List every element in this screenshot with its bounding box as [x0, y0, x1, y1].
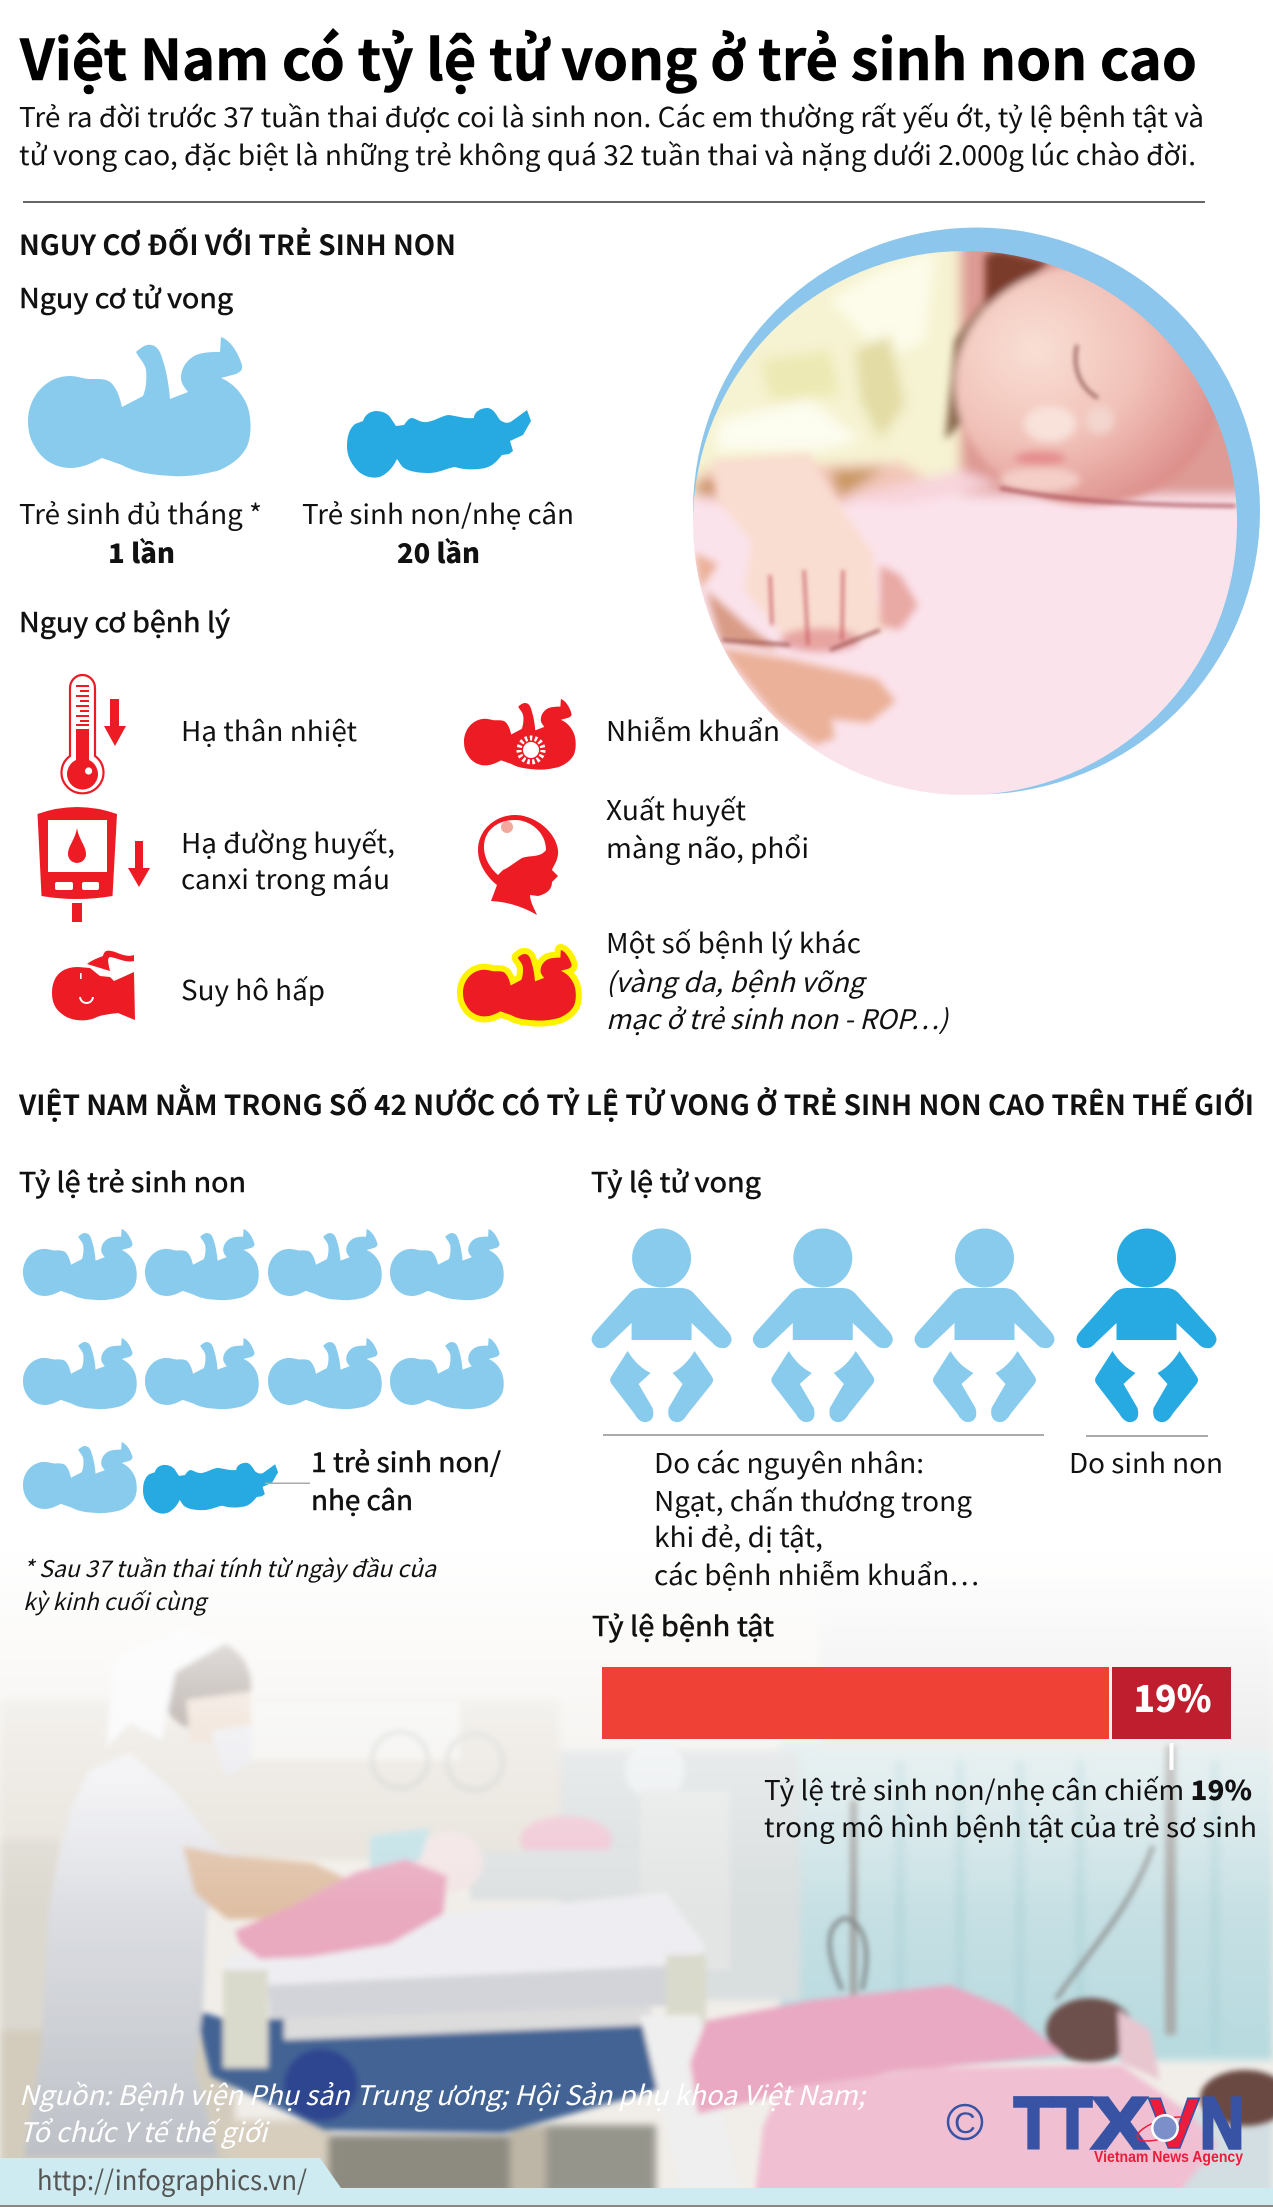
- heading: morbidity rate: Tỷ lệ bệnh tật: [592, 1605, 774, 1644]
- label: full-term: [19, 493, 262, 571]
- footnote: * Sau 37 tuần thai tính từ ngày đầu của: [23, 1550, 437, 1584]
- source: [19, 2074, 866, 2150]
- callout: morbidity explanation: trong mô hình bệnh tật của trẻ sơ sinh: [764, 1806, 1257, 1845]
- text: haemorrhage: màng não, phổi: [606, 827, 809, 866]
- text: due to preterm birth: Do sinh non: [1069, 1442, 1223, 1481]
- logo: copyright and TTXVN: T: [1014, 2084, 1053, 2164]
- intro text: Trẻ ra đời trước 37 tuần thai được coi là sinh non. Các em thường rất yếu ớt, tỷ lệ bệnh tật và: [19, 96, 1204, 135]
- text: haemorrhage: [606, 789, 809, 866]
- footnote: kỳ kinh cuối cùng: [23, 1583, 209, 1617]
- label: preterm: 20 lần: [397, 532, 480, 571]
- logo: copyright and TTXVN: N: [1200, 2084, 1244, 2164]
- label: preterm: Trẻ sinh non/nhẹ cân: [302, 493, 574, 532]
- text: low blood sugar: [181, 822, 395, 897]
- circular baby photo: [680, 228, 1260, 805]
- bar chart: 19% morbidity: 19%: [1134, 1669, 1212, 1723]
- icon: glucose meter: [38, 807, 150, 922]
- label: one preterm baby: nhẹ cân: [311, 1479, 413, 1518]
- poles and tube: [1165, 1745, 1176, 2035]
- text: other causes: Ngạt, chấn thương trong: [654, 1480, 972, 1519]
- newborn at right: [1046, 1998, 1134, 2062]
- callout: morbidity explanation: [764, 1769, 1257, 1845]
- heading: mortality rate: Tỷ lệ tử vong: [591, 1161, 761, 1200]
- text: other conditions: mạc ở trẻ sinh non - ROP…): [606, 998, 950, 1037]
- logo: copyright and TTXVN: V: [1148, 2084, 1200, 2164]
- text: hypothermia: Hạ thân nhiệt: [181, 710, 357, 749]
- bar chart: 19% morbidity: [602, 1667, 1231, 1770]
- swaddled baby left: [422, 1835, 483, 1889]
- text: other causes: khi đẻ, dị tật,: [654, 1516, 823, 1555]
- source: Tổ chức Y tế thế giới: [19, 2111, 271, 2150]
- text: other conditions: (vàng da, bệnh võng: [606, 961, 868, 1000]
- source: Nguồn: Bệnh viện Phụ sản Trung ương; Hội Sản phụ khoa Việt Nam;: [19, 2074, 866, 2113]
- section heading: Vietnam among 42 countries: VIỆT NAM NẰM TRONG SỐ 42 NƯỚC CÓ TỶ LỆ TỬ VONG Ở TRẺ SINH NON CAO TRÊN THẾ GIỚI: [18, 1083, 1254, 1124]
- icon: jaundice baby: [463, 950, 576, 1021]
- logo: copyright and TTXVN: [948, 2084, 1244, 2166]
- logo: copyright and TTXVN: T: [1053, 2084, 1092, 2164]
- logo: copyright and TTXVN: C: [954, 2107, 976, 2140]
- callout: morbidity explanation: Tỷ lệ trẻ sinh non/nhẹ cân chiếm 19%: [764, 1769, 1252, 1808]
- footer band with URL: http://infographics.vn/: [37, 2159, 307, 2198]
- icon: brain haemorrhage: [478, 815, 558, 915]
- text: other causes: Do các nguyên nhân:: [654, 1442, 924, 1481]
- logo: copyright and TTXVN: Vietnam News Agency: [1094, 2149, 1243, 2166]
- title: Việt Nam có tỷ lệ tử vong ở trẻ sinh non cao: [19, 16, 1197, 97]
- icon: preterm baby: [347, 408, 531, 478]
- footer band with URL: [0, 2158, 1273, 2205]
- icon: infection: [464, 699, 576, 770]
- heading: preterm rate: Tỷ lệ trẻ sinh non: [19, 1161, 246, 1200]
- label: full-term: 1 lần: [108, 532, 175, 571]
- text: haemorrhage: Xuất huyết: [606, 789, 746, 828]
- intro text: tử vong cao, đặc biệt là những trẻ không quá 32 tuần thai và nặng dưới 2.000g lúc chào đời.: [19, 134, 1196, 173]
- text: infection: Nhiễm khuẩn: [606, 710, 780, 749]
- label: preterm: [302, 493, 574, 571]
- icon: respiratory failure: [52, 951, 135, 1020]
- text: other causes: [654, 1442, 979, 1593]
- heading: mortality risk: Nguy cơ tử vong: [19, 277, 233, 316]
- pictogram: mortality share: [592, 1228, 1216, 1437]
- text: other causes: các bệnh nhiễm khuẩn…: [654, 1554, 979, 1593]
- machine: [195, 2010, 660, 2133]
- text: other conditions: Một số bệnh lý khác: [606, 922, 861, 961]
- icon: thermometer: [61, 675, 126, 793]
- footnote: [23, 1550, 437, 1617]
- text: low blood sugar: Hạ đường huyết,: [181, 822, 395, 861]
- logo: copyright and TTXVN: X: [1092, 2084, 1148, 2164]
- heading: disease risk: Nguy cơ bệnh lý: [19, 601, 230, 640]
- icon: full-term baby: [28, 337, 251, 476]
- text: respiratory failure: Suy hô hấp: [181, 969, 325, 1008]
- label: one preterm baby: [311, 1441, 501, 1518]
- text: low blood sugar: canxi trong máu: [181, 858, 390, 897]
- section heading: risks: NGUY CƠ ĐỐI VỚI TRẺ SINH NON: [19, 224, 456, 264]
- text: other conditions: [606, 922, 950, 1037]
- incubators behind: [252, 1706, 459, 1759]
- label: full-term: Trẻ sinh đủ tháng *: [19, 493, 262, 532]
- nurse: [24, 1754, 232, 2158]
- intro text: [19, 96, 1204, 173]
- background photo: hospital neonatal ward: [0, 1642, 1273, 2207]
- pictogram: 1 in 10 preterm babies: [23, 1229, 504, 1514]
- label: one preterm baby: 1 trẻ sinh non/: [311, 1441, 501, 1480]
- sheet under newborn: [638, 2012, 704, 2094]
